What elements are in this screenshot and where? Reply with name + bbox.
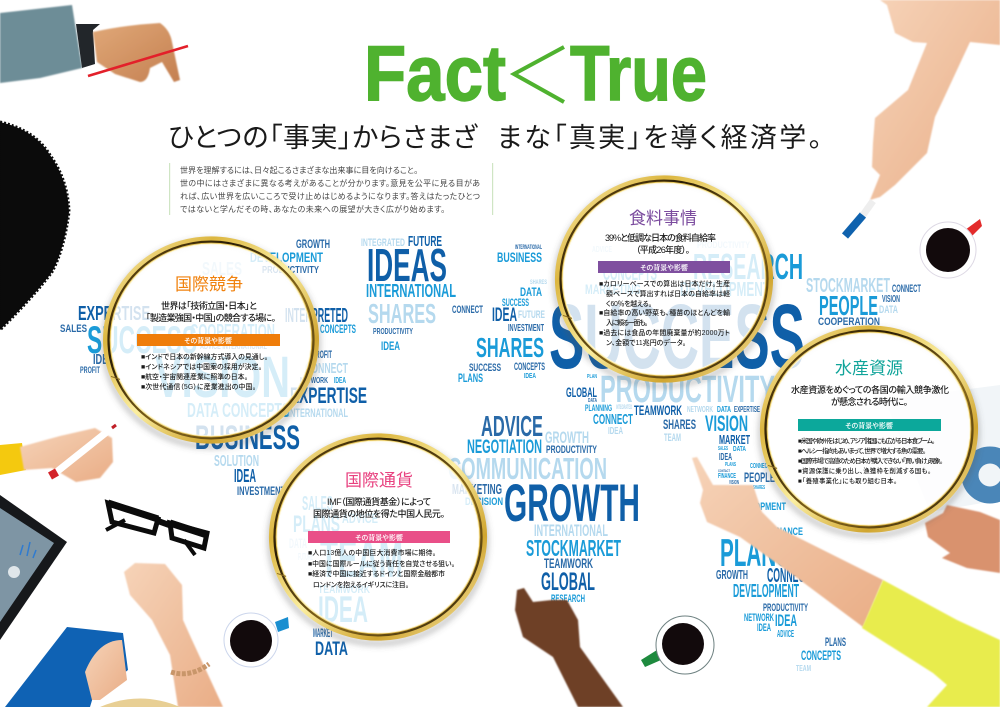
words: north america: PRODUCTIVITY <box>262 265 319 276</box>
words: greenland and atlantic: IDEA <box>381 339 400 353</box>
words: australia and pacific: DATA <box>315 639 348 660</box>
summary: competition: 「製造業強国・中国」の競合する場に。 <box>146 312 276 323</box>
bullets: food: く60％を越える。 <box>606 299 652 308</box>
words: south america and africa: GROWTH <box>545 428 589 447</box>
words: eurasia: VISION <box>705 411 748 436</box>
words: north america: EXPERTISE <box>290 383 367 408</box>
banner: currency: その背景や影響 <box>355 533 403 542</box>
words: eurasia: IDEA <box>719 452 732 463</box>
words: eurasia: SALES <box>718 446 728 452</box>
heading: fishery: 水産資源 <box>835 359 903 378</box>
photo: document with gear <box>885 385 1000 512</box>
words: south america and africa: INTERNATIONAL <box>534 521 608 540</box>
banner: competition: その背景や影響 <box>184 336 232 345</box>
words: australia and pacific: FUTURE <box>298 552 313 563</box>
words: south america and africa: PRODUCTIVITY <box>546 444 597 456</box>
words: eurasia: MARKET <box>719 432 750 447</box>
words: australia and pacific: IDEA <box>318 589 368 630</box>
banner: food: その背景や影響 <box>640 263 688 272</box>
bullets: currency: ■人口13億人の中国巨大消費市場に期待。 <box>308 548 436 557</box>
words: eurasia <box>549 240 921 491</box>
words: eurasia: RESEARCH <box>693 246 803 287</box>
words: north america: INTERNATIONAL <box>288 406 348 420</box>
bullets: competition: ■航空・宇宙関連産業に照準の日本。 <box>141 372 248 381</box>
words: australia and pacific: CONNECT <box>767 565 810 587</box>
bullets: fishery <box>798 436 943 485</box>
words: eurasia: CONTACT <box>718 468 730 473</box>
words: greenland and atlantic: INVESTMENT <box>508 323 544 334</box>
summary: food <box>605 232 716 255</box>
words: australia and pacific: FINANCE <box>770 526 803 538</box>
words: eurasia: COOPERATION <box>818 316 880 328</box>
words: south america and africa: ADVICE <box>481 411 543 443</box>
words: australia and pacific: NETWORK <box>744 612 774 624</box>
subtitle <box>168 123 822 153</box>
lens: international currency <box>270 437 486 644</box>
words: eurasia: PRODUCTIVITY <box>600 369 775 411</box>
words: eurasia: CONCEPTS <box>603 263 657 285</box>
photo: tablet <box>0 495 67 640</box>
words: greenland and atlantic: DATA <box>520 285 542 299</box>
summary: food: 39%と低調な日本の食料自給率 <box>605 232 716 243</box>
banner: fishery <box>798 419 941 431</box>
banner: currency <box>308 531 450 543</box>
bullets: competition: ■インドネシアでは中国案の採用が決定。 <box>141 362 262 371</box>
words: north america: IDEA <box>334 376 346 385</box>
words: eurasia: PEOPLE <box>819 290 878 321</box>
words: south america and africa: TEAMWORK <box>544 555 593 571</box>
words: australia and pacific: TEAM <box>796 664 811 673</box>
summary: currency <box>313 496 445 519</box>
lens: international competition <box>104 240 318 447</box>
intro paragraph: 世界を理解するには、日々起こるさまざまな出来事に目を向けること。 <box>180 165 418 175</box>
words: north america: IDEA <box>234 466 256 486</box>
words: greenland and atlantic: SHARES <box>476 332 544 363</box>
words: australia and pacific: IDEA <box>775 611 797 630</box>
words: australia and pacific: DEVELOPMENT <box>730 501 786 513</box>
banner: competition <box>137 334 280 346</box>
photo: black hair <box>0 122 69 330</box>
title: Fact < True <box>364 29 707 117</box>
words: australia and pacific: PRODUCTIVITY <box>763 602 808 614</box>
bullets: competition: ■インドで日本の新幹線方式導入の見通し。 <box>141 352 268 361</box>
words: greenland and atlantic: BUSINESS <box>497 249 542 265</box>
words: north america: COOPERATION <box>190 321 275 343</box>
words: north america: PROFIT <box>80 365 100 375</box>
icon: blue coffee cup <box>224 613 289 667</box>
words: australia and pacific: SALES <box>302 493 333 515</box>
words: eurasia: PRODUCTIVITY <box>697 240 750 250</box>
bullets: fishery: ■ヘルシー指向もあいまって、世界で増大する魚の需要。 <box>798 446 926 455</box>
words: greenland and atlantic: FUTURE <box>518 309 545 321</box>
words: eurasia: VISION <box>729 480 739 486</box>
words: eurasia: DATA <box>717 405 731 414</box>
words: eurasia: CONNECT <box>892 283 921 295</box>
words: south america and africa: MARKETING <box>452 481 502 498</box>
words: australia and pacific: DEVELOPMENT <box>733 581 799 601</box>
photo: grey sleeve arm with red pencil <box>0 5 188 83</box>
words: australia and pacific: DATA <box>289 535 307 551</box>
words: eurasia: MARKETING <box>585 281 641 297</box>
words: north america: SALES <box>202 259 242 279</box>
banner: food <box>598 261 730 273</box>
words: eurasia: DATA <box>588 398 597 404</box>
words: eurasia: DATA <box>733 446 746 453</box>
words: north america: DEVELOPMENT <box>250 249 323 265</box>
bullets: fishery: ■米国や欧州をはじめ、アジア諸国にも広がる日本食ブーム。 <box>798 436 935 445</box>
bullets: food <box>599 279 730 347</box>
words: eurasia: INTEGRATED <box>616 405 632 411</box>
icon: green coffee cup <box>641 616 714 674</box>
bullets: currency <box>308 548 455 589</box>
words: eurasia: EXPERTISE <box>734 405 760 414</box>
words: australia and pacific: GROWTH <box>716 567 748 582</box>
words: australia and pacific: MARKET <box>313 626 333 640</box>
words: south america and africa: NEGOTIATION <box>467 437 542 458</box>
words: australia and pacific: ADVICE <box>342 510 378 526</box>
bullets: currency: ■経済で中国に接近するドイツと国際金融都市 <box>308 569 445 578</box>
banner: fishery: その背景や影響 <box>845 421 893 430</box>
bullets: food: ■過去には食品の年間廃棄量が約2000万ト <box>599 328 730 337</box>
photo: bottom left arm with bracelet <box>5 563 223 707</box>
words: south america and africa: DECISION <box>465 496 503 508</box>
lens: food supply <box>556 179 772 386</box>
words: north america: EXPERTISE <box>78 303 150 325</box>
heading: competition: 国際競争 <box>175 275 243 294</box>
words: eurasia: GLOBAL <box>566 384 597 400</box>
words: eurasia: CONNECT <box>750 463 770 470</box>
summary: currency: IMF（国際通貨基金）によって <box>327 496 431 507</box>
bullets: food: ン、金額で11兆円のデータ。 <box>606 338 686 347</box>
word cloud world map <box>60 233 921 673</box>
words: australia and pacific: TEAMWORK <box>318 584 370 596</box>
words: north america: SALES <box>60 323 87 335</box>
heading: food: 食料事情 <box>629 209 697 228</box>
summary: fishery <box>791 384 949 407</box>
words: australia and pacific: CONCEPTS <box>801 647 841 663</box>
bullets: competition <box>141 352 268 391</box>
bullets: fishery: ■「養殖事業化」にも取り組む日本。 <box>798 476 897 485</box>
words: north america: INVESTMENT <box>237 484 285 498</box>
title: Fact < True: Fact <box>364 29 506 117</box>
words: greenland and atlantic: INTEGRATED <box>361 237 405 249</box>
title: Fact < True: True <box>570 29 707 117</box>
summary: food: （平成26年度）。 <box>636 244 690 255</box>
words: eurasia: PEOPLE <box>744 469 775 485</box>
words: eurasia: TEAM <box>664 432 681 444</box>
words: eurasia: PLANS <box>725 462 736 468</box>
words: greenland and atlantic: FUTURE <box>408 233 442 250</box>
words: greenland and atlantic <box>361 233 547 385</box>
bullets: currency: ■中国に国際ルールに従う責任を自覚させる狙い。 <box>308 559 455 568</box>
words: australia and pacific: PLANS <box>720 532 790 575</box>
words: australia and pacific: ADVICE <box>777 629 794 640</box>
intro paragraph <box>169 163 493 215</box>
intro paragraph: 世の中にはさまざまに異なる考えがあることが分かります。意見を公平に見る目があ <box>180 178 480 188</box>
words: greenland and atlantic: SHARES <box>530 280 547 286</box>
words: north america: BUSINESS <box>195 419 300 457</box>
bullets: food: ■自給率の高い野菜も、種苗のほとんどを輸 <box>599 308 730 317</box>
heading: currency: 国際通貨 <box>345 471 413 490</box>
words: greenland and atlantic: PLANS <box>458 371 483 385</box>
words: north america: VISION <box>155 345 290 410</box>
words: eurasia: IDEA <box>608 426 623 437</box>
words: greenland and atlantic: SHARES <box>368 298 436 329</box>
bullets: currency: ロンドンを抱えるイギリスに注目。 <box>313 580 409 589</box>
words: australia and pacific: IDEA <box>757 622 771 634</box>
words: eurasia: STOCKMARKET <box>806 275 890 297</box>
words: eurasia: ADVICE <box>592 245 612 254</box>
summary: fishery: が懸念される時代に。 <box>831 396 908 407</box>
icon: red coffee cup <box>920 219 982 278</box>
words: north america: ADVICE INTERNATIONAL <box>200 342 267 351</box>
photo: dark hand pointing <box>515 588 623 707</box>
words: greenland and atlantic: SUCCESS <box>469 362 501 374</box>
intro paragraph: れば、広い世界を広いこころで受け止めはじめるようになります。答えはたったひとつ <box>180 191 480 201</box>
words: greenland and atlantic: SUCCESS <box>502 297 529 309</box>
words: greenland and atlantic: INTERNATIONAL <box>366 281 456 301</box>
words: australia and pacific: PLANS <box>293 511 340 538</box>
words: north america: PROFIT <box>312 349 332 361</box>
words: australia and pacific: TEAM <box>320 527 403 589</box>
words: eurasia: TEAMWORK <box>634 402 682 418</box>
words: australia and pacific: PLANS <box>825 635 846 649</box>
words: north america: DATA CONCEPTS <box>187 400 290 422</box>
words: eurasia: NETWORK <box>687 405 713 414</box>
words: greenland and atlantic: CONCEPTS <box>514 361 545 373</box>
bullets: food: ■カロリーベースでの算出は日本だけ。生産 <box>599 279 730 288</box>
summary: competition: 世界は「技術立国・日本」と <box>161 300 257 311</box>
words: greenland and atlantic: IDEA <box>524 373 536 380</box>
words: south america and africa: RESEARCH <box>551 593 585 605</box>
words: eurasia: DATA <box>879 304 898 316</box>
words: eurasia: PLAN <box>587 374 597 380</box>
words: north america: CONCEPTS <box>320 322 356 336</box>
subtitle: まな「真実」を導く経済学。 <box>497 123 822 153</box>
words: eurasia: FINANCE <box>718 473 736 480</box>
words: greenland and atlantic: CONNECT <box>452 304 483 316</box>
summary: fishery: 水産資源をめぐっての各国の輸入競争激化 <box>791 384 949 395</box>
bullets: food: 入に頼る一面も。 <box>606 318 648 327</box>
lens: fishery resources <box>761 329 977 536</box>
bullets: food: 額ベースで算出すれば日本の自給率は軽 <box>606 289 730 298</box>
words: south america and africa: COMMUNICATION <box>448 451 607 486</box>
words: eurasia: SHARES <box>753 485 765 491</box>
summary: competition <box>146 300 276 323</box>
words: north america: CONNECT <box>305 360 348 377</box>
words: eurasia: SHARES <box>663 416 696 432</box>
photo: pointing arm with yellow sleeve <box>692 457 1000 707</box>
photo: top right hand with blue marker <box>845 0 1000 236</box>
words: greenland and atlantic: PRODUCTIVITY <box>373 327 413 336</box>
words: north america: SOLUTION <box>214 453 259 470</box>
words: south america and africa: GLOBAL <box>541 568 595 596</box>
words: north america: IDEA <box>93 351 115 368</box>
words: eurasia: CONNECT <box>593 411 633 428</box>
words: north america <box>60 237 367 498</box>
intro paragraph: ではないと学んだその時、あなたの未来への展望が大きく広がり始めます。 <box>180 204 445 214</box>
photo: glasses <box>106 503 207 555</box>
words: eurasia: VISION <box>882 294 900 305</box>
words: north america: SUCCESS <box>87 319 197 362</box>
words: south america and africa: STOCKMARKET <box>526 535 621 561</box>
words: greenland and atlantic: IDEAS <box>367 239 447 291</box>
words: south america and africa: GROWTH <box>504 474 640 533</box>
words: north america: GROWTH <box>296 237 330 251</box>
words: south america and africa <box>448 411 640 605</box>
bullets: fishery: ■国際市場で高値のため日本が購入できない「買い負け」現象。 <box>798 456 943 465</box>
bullets: competition: ■次世代通信（5G）に産業進出の中国。 <box>141 382 256 391</box>
words: greenland and atlantic: INTERNATIONAL <box>515 245 542 251</box>
words: greenland and atlantic: IDEA <box>492 305 517 326</box>
words: eurasia: PLANNING <box>585 403 612 413</box>
subtitle: ひとつの「事実」からさまざ <box>168 123 479 153</box>
photo: right hand <box>925 505 1000 573</box>
words: eurasia: DEVELOPMENT <box>680 279 770 301</box>
words: eurasia: SUCCESS <box>549 286 805 388</box>
summary: currency: 国際通貨の地位を得た中国人民元。 <box>313 508 445 519</box>
photo: left hand with marker <box>0 425 116 482</box>
words: north america: NETWORK <box>300 376 328 385</box>
words: australia and pacific <box>289 493 846 673</box>
words: north america: INTERPRETED <box>285 305 348 327</box>
bullets: fishery: ■資源保護に乗り出し、漁獲枠を削減する国も。 <box>798 466 931 475</box>
